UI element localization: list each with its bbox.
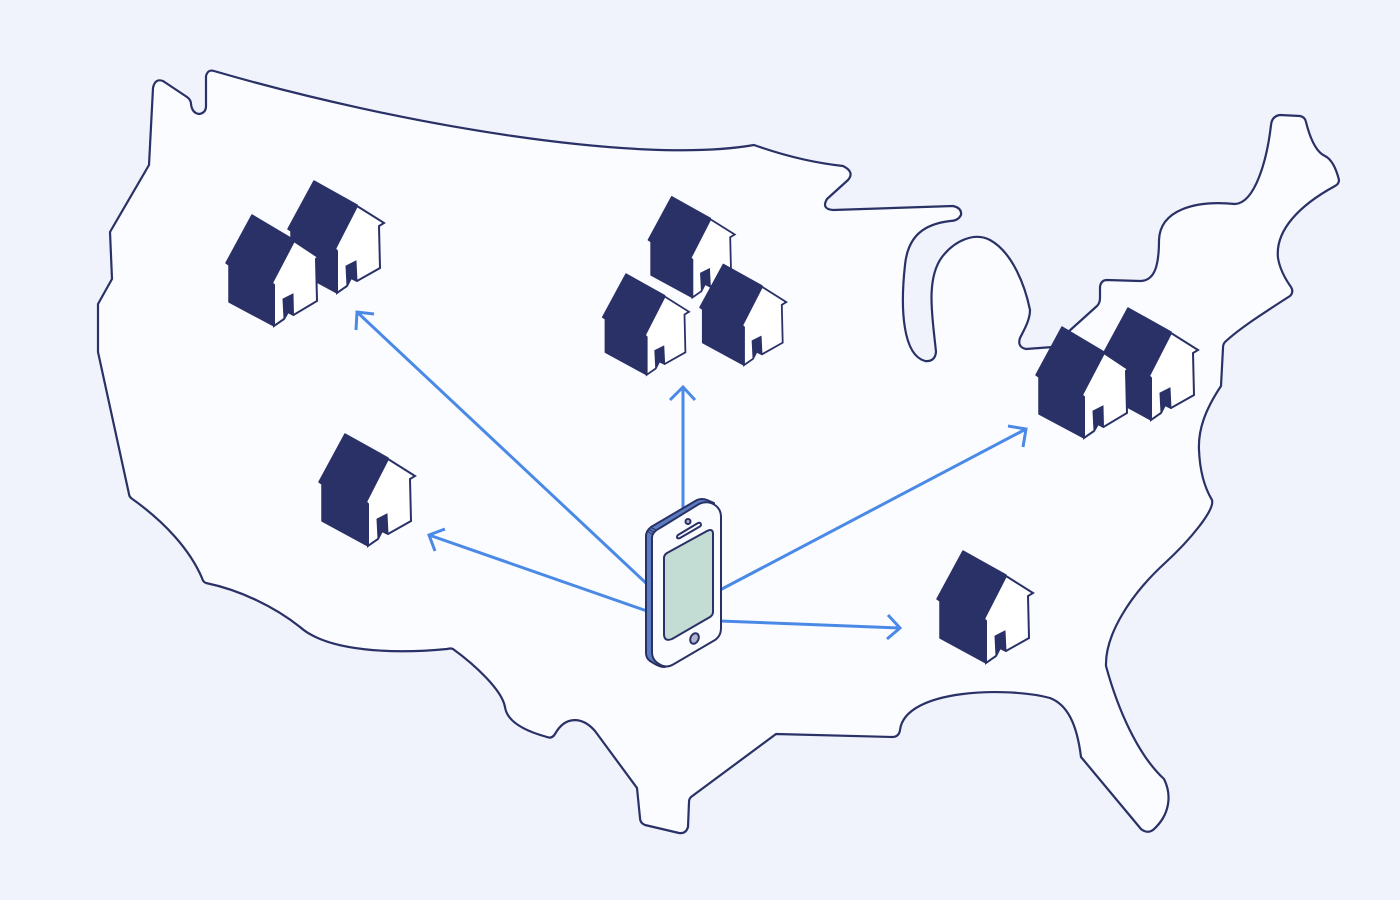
- arrow: phone to southeast home: [720, 615, 900, 639]
- houses: northwest pair: [226, 181, 384, 326]
- map: United States outline: [98, 71, 1339, 833]
- house: southeast: [937, 551, 1033, 663]
- phone side: [646, 499, 714, 667]
- phone camera: [686, 519, 690, 524]
- phone speaker: [677, 523, 701, 538]
- house: west: [319, 434, 415, 546]
- phone front: [652, 502, 721, 666]
- arrow: phone to northeast homes: [720, 426, 1026, 590]
- phone side ribs: [647, 527, 656, 534]
- houses: central trio: [603, 197, 786, 375]
- phone screen: [664, 530, 713, 640]
- phone home button: [689, 632, 700, 645]
- arrow: phone to central homes: [670, 387, 695, 510]
- houses: northeast pair: [1036, 308, 1198, 438]
- icon: smartphone: [646, 499, 721, 667]
- arrow: phone to western home: [429, 529, 647, 611]
- arrow: phone to northwest homes: [356, 312, 647, 584]
